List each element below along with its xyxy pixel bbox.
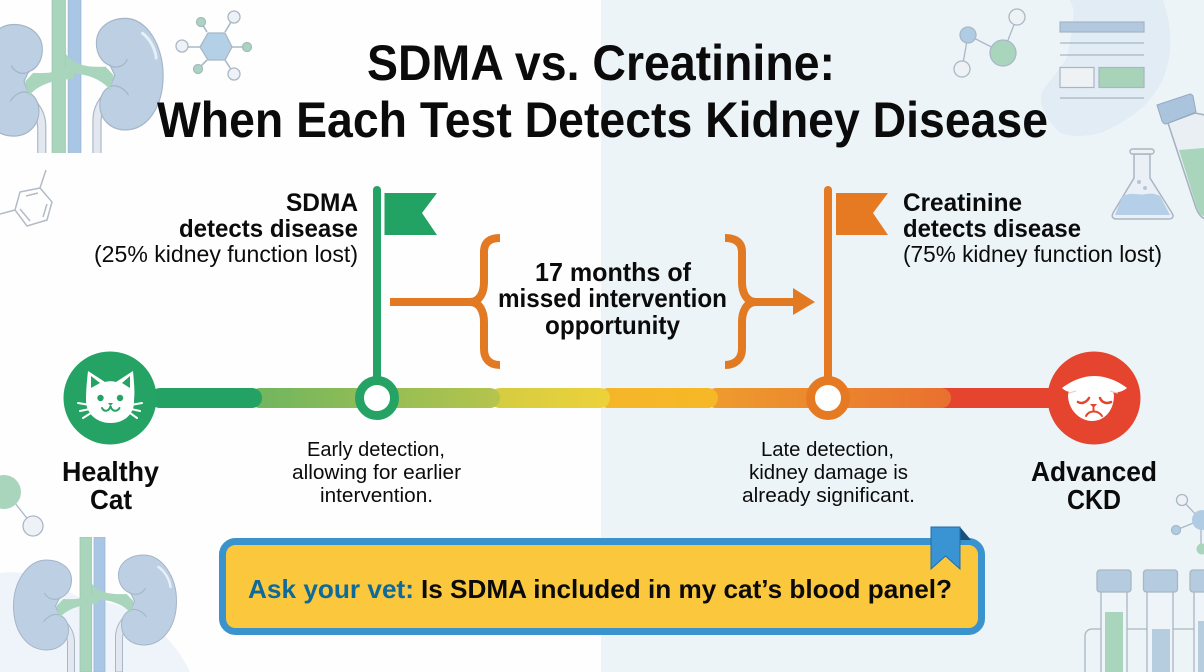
decoration: test tube	[1157, 94, 1204, 220]
text: SDMA label: detects disease	[179, 215, 358, 243]
text: advanced CKD: CKD	[1067, 484, 1121, 515]
decoration: benzene ring	[0, 170, 52, 226]
text: early detection: allowing for earlier	[292, 462, 461, 484]
title: When Each Test Detects Kidney Disease	[157, 92, 1048, 148]
text: missed opportunity	[498, 257, 727, 340]
decoration: molecule right	[1172, 494, 1204, 554]
text: SDMA label	[94, 189, 358, 267]
text: creatinine label	[903, 189, 1162, 267]
decoration: flask	[1112, 149, 1173, 219]
text: advanced CKD	[1031, 456, 1157, 515]
text: early detection	[292, 439, 461, 507]
arrow: missed intervention span	[390, 238, 815, 365]
text: healthy cat: Cat	[90, 484, 132, 515]
text: creatinine label: Creatinine	[903, 189, 1022, 217]
decoration: molecule left	[0, 475, 43, 536]
text: early detection: Early detection,	[307, 439, 445, 461]
text: late detection: kidney damage is	[749, 462, 908, 484]
text: SDMA label: SDMA	[286, 189, 358, 217]
decoration: molecule top right	[954, 9, 1025, 77]
text: healthy cat	[62, 456, 159, 515]
text: advanced CKD: Advanced	[1031, 456, 1157, 487]
text: missed opportunity: opportunity	[545, 310, 680, 340]
text: late detection: Late detection,	[761, 439, 894, 461]
icon: bookmark	[931, 527, 971, 569]
marker: SDMA flag	[360, 186, 437, 416]
decoration: kidneys bottom left	[14, 537, 176, 672]
callout: ask your vet	[222, 527, 982, 632]
decoration: hexagon molecule	[176, 11, 252, 80]
callout: ask your vet: Is SDMA included in my cat’s blood panel?	[421, 574, 952, 604]
text: missed opportunity: 17 months of	[535, 257, 691, 287]
decoration: kidneys top left	[0, 0, 163, 170]
decoration: test tube rack	[1085, 570, 1204, 672]
text: early detection: intervention.	[320, 485, 433, 507]
text: late detection: already significant.	[742, 485, 915, 507]
title: SDMA vs. Creatinine:	[367, 35, 835, 91]
callout: ask your vet: Ask your vet:	[248, 574, 414, 604]
title	[157, 35, 1048, 148]
icon: healthy cat	[64, 352, 156, 444]
icon: sick cat	[1048, 352, 1140, 444]
text: late detection	[742, 439, 915, 507]
text: healthy cat: Healthy	[62, 456, 159, 487]
marker: creatinine flag	[810, 186, 888, 416]
text: creatinine label: (75% kidney function lost)	[903, 241, 1162, 267]
text: missed opportunity: missed intervention	[498, 283, 727, 313]
timeline bar	[150, 388, 1060, 408]
decoration: lab report	[1060, 22, 1144, 98]
text: creatinine label: detects disease	[903, 215, 1081, 243]
text: SDMA label: (25% kidney function lost)	[94, 241, 358, 267]
